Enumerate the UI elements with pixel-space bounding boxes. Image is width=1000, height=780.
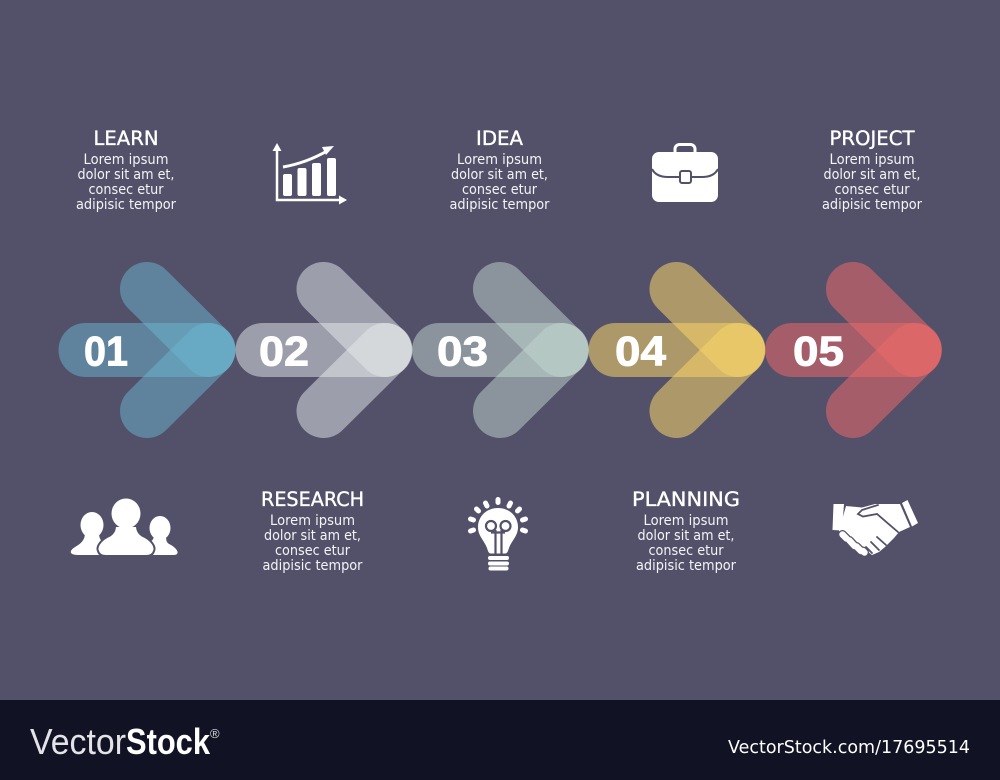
arrow 01: 01 — [84, 328, 128, 374]
footer bar — [0, 700, 1000, 780]
step 3 text: idea: consec etur — [462, 182, 537, 198]
step 2 text: research: dolor sit am et, — [264, 528, 361, 544]
step 2 text: research: RESEARCH — [261, 488, 364, 511]
footer url: VectorStock.com/17695514 — [728, 737, 970, 758]
step 5 text: project — [822, 127, 922, 213]
arrow 03: 03 — [437, 328, 488, 374]
logo: VectorStock: Stock — [126, 721, 211, 762]
icon: people — [71, 498, 178, 556]
arrow 04 — [588, 289, 766, 411]
step 2 text: research: consec etur — [275, 543, 350, 559]
step 4 text: planning — [632, 488, 740, 574]
step 1 text: learn: consec etur — [88, 182, 164, 198]
step 3 text: idea — [450, 127, 550, 213]
step 3 text: idea: dolor sit am et, — [451, 167, 548, 183]
step 5 text: project: Lorem ipsum — [830, 152, 914, 168]
arrow 02: 02 — [259, 328, 309, 374]
arrow 05 — [765, 289, 942, 411]
step 2 text: research — [261, 488, 364, 574]
step 5 text: project: dolor sit am et, — [824, 167, 920, 183]
step 3 text: idea: IDEA — [476, 127, 524, 150]
step 4 text: planning: Lorem ipsum — [644, 513, 728, 529]
step 5 text: project: consec etur — [834, 182, 910, 198]
icon: briefcase — [652, 144, 718, 202]
icon: handshake — [832, 500, 918, 555]
step 5 text: project: adipisic tempor — [822, 197, 922, 213]
logo: VectorStock: Vector — [30, 721, 126, 762]
step 2 text: research: adipisic tempor — [262, 558, 363, 574]
step 4 text: planning: consec etur — [648, 543, 724, 559]
logo: VectorStock: ® — [210, 726, 220, 741]
icon: light bulb — [470, 500, 526, 570]
step 1 text: learn: LEARN — [94, 127, 158, 150]
step 1 text: learn — [76, 127, 176, 213]
step 4 text: planning: dolor sit am et, — [638, 528, 734, 544]
step 3 text: idea: Lorem ipsum — [457, 152, 542, 168]
arrow 04: 04 — [615, 328, 667, 374]
arrow 02 — [236, 289, 412, 411]
arrow 05: 05 — [793, 328, 844, 374]
step 4 text: planning: PLANNING — [632, 488, 740, 511]
arrow 01 — [58, 289, 236, 411]
step 1 text: learn: dolor sit am et, — [78, 167, 174, 183]
step 1 text: learn: adipisic tempor — [76, 197, 176, 213]
arrow 03 — [412, 289, 589, 411]
step 1 text: learn: Lorem ipsum — [84, 152, 168, 168]
step 5 text: project: PROJECT — [830, 127, 915, 150]
step 2 text: research: Lorem ipsum — [270, 513, 355, 529]
icon: bar chart — [272, 143, 347, 204]
logo: VectorStock — [30, 721, 220, 762]
step 4 text: planning: adipisic tempor — [636, 558, 736, 574]
step 3 text: idea: adipisic tempor — [450, 197, 550, 213]
